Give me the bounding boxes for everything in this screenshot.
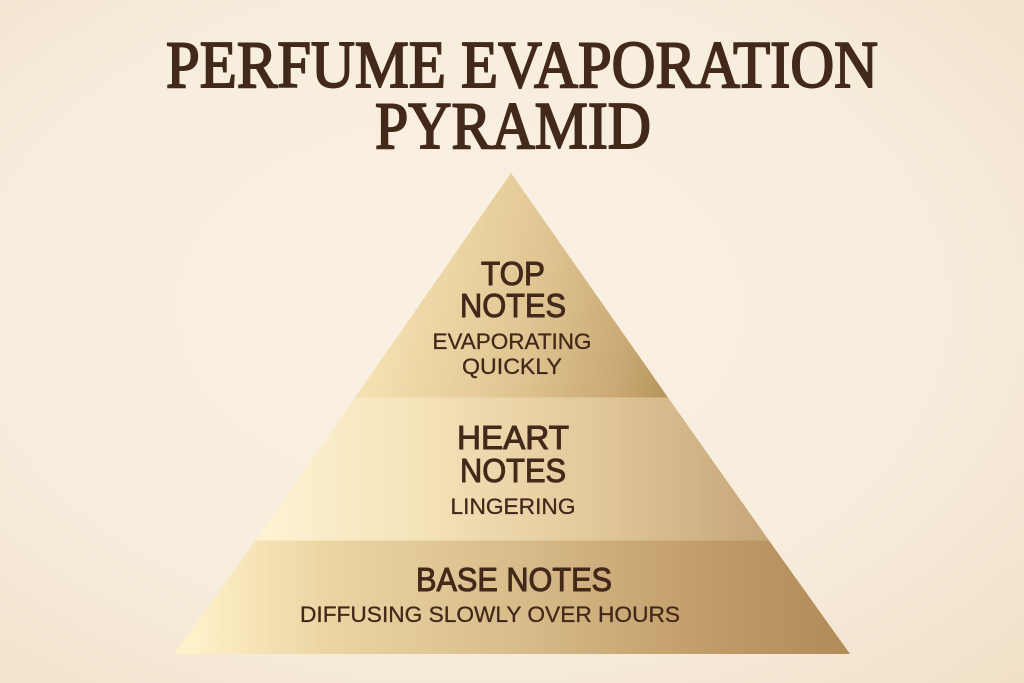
heart notes description: LINGERING: [450, 494, 576, 519]
top notes heading: NOTES: [460, 287, 566, 324]
heart notes heading: HEART: [457, 419, 569, 456]
top notes description: EVAPORATING: [432, 329, 592, 354]
top notes description: QUICKLY: [462, 354, 562, 379]
base notes heading: BASE NOTES: [416, 561, 612, 598]
title: [166, 28, 878, 163]
title: PERFUME EVAPORATION: [166, 28, 878, 102]
tier: heart notes: [256, 398, 769, 540]
heart notes heading: [457, 419, 569, 489]
heart notes heading: NOTES: [460, 452, 566, 489]
pyramid: [174, 173, 850, 654]
top notes description: [432, 329, 592, 379]
tier: top notes: [355, 173, 668, 398]
base notes description: DIFFUSING SLOWLY OVER HOURS: [300, 602, 680, 627]
top notes heading: [460, 255, 566, 324]
top notes heading: TOP: [481, 255, 545, 292]
title: PYRAMID: [375, 89, 651, 163]
tier: base notes: [174, 540, 850, 654]
